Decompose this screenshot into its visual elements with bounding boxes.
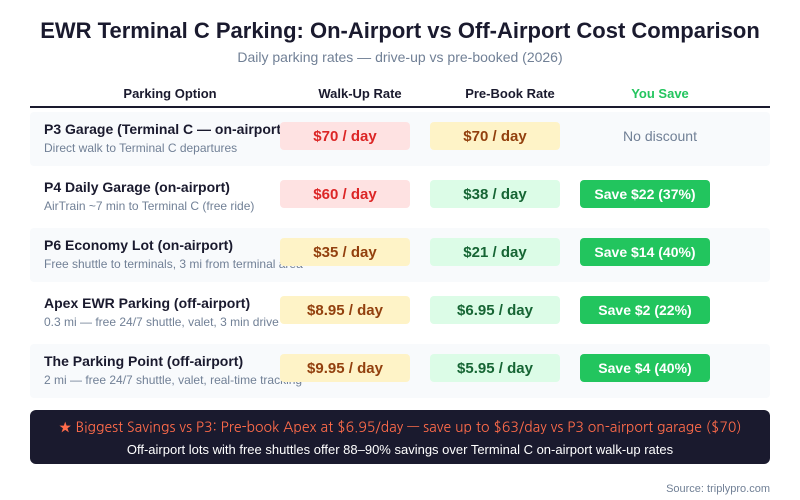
table header: You Save xyxy=(631,86,689,101)
row: The Parking Point xyxy=(30,344,770,398)
row: P3 Garage: P3 Garage (Terminal C — on-airport) xyxy=(44,121,286,137)
row: P3 Garage: $70 / day xyxy=(463,128,527,145)
row: P3 Garage: Direct walk to Terminal C departures xyxy=(44,141,237,155)
row: The Parking Point: Save $4 (40%) xyxy=(598,360,692,376)
row: P3 Garage: $70 / day xyxy=(313,128,377,145)
row: Apex EWR Parking: Apex EWR Parking (off-airport) xyxy=(44,295,250,311)
row: P6 Economy Lot: Save $14 (40%) xyxy=(594,244,696,260)
subtitle: Daily parking rates — drive-up vs pre-booked (2026) xyxy=(237,49,563,65)
row: P4 Daily Garage: $38 / day xyxy=(463,186,527,203)
row: P3 Garage: No discount xyxy=(623,128,697,144)
table header: Walk-Up Rate xyxy=(318,86,402,101)
row: The Parking Point: $9.95 / day xyxy=(307,360,384,377)
table header: Pre-Book Rate xyxy=(465,86,555,101)
row: P3 Garage xyxy=(30,112,770,166)
row: The Parking Point: The Parking Point (off-airport) xyxy=(44,353,243,369)
callout banner: ★ Biggest Savings vs P3: Pre-book Apex at $6.95/day — save up to $63/day vs P3 on-airport garage ($70) xyxy=(59,420,741,435)
row: Apex EWR Parking: $8.95 / day xyxy=(307,302,384,319)
callout banner xyxy=(30,410,770,464)
row: The Parking Point: $5.95 / day xyxy=(457,360,534,377)
row: P6 Economy Lot: $21 / day xyxy=(463,244,527,261)
row: Apex EWR Parking: Save $2 (22%) xyxy=(598,302,692,318)
row: Apex EWR Parking: $6.95 / day xyxy=(457,302,534,319)
row: P4 Daily Garage: $60 / day xyxy=(313,186,377,203)
row: P4 Daily Garage: P4 Daily Garage (on-airport) xyxy=(44,179,230,195)
row: P4 Daily Garage xyxy=(44,179,710,213)
row: P6 Economy Lot: $35 / day xyxy=(313,244,377,261)
row: P4 Daily Garage: Save $22 (37%) xyxy=(594,186,696,202)
table header xyxy=(30,86,770,108)
callout banner: Off-airport lots with free shuttles offer 88–90% savings over Terminal C on-airport walk-up rates xyxy=(127,442,674,457)
row: P4 Daily Garage: AirTrain ~7 min to Terminal C (free ride) xyxy=(44,199,254,213)
row: P6 Economy Lot: P6 Economy Lot (on-airport) xyxy=(44,237,233,253)
source note: Source: triplypro.com xyxy=(666,483,770,495)
row: The Parking Point: 2 mi — free 24/7 shuttle, valet, real-time tracking xyxy=(44,373,302,387)
table header: Parking Option xyxy=(123,86,217,101)
row: P6 Economy Lot xyxy=(30,228,770,282)
title: EWR Terminal C Parking: On-Airport vs Off-Airport Cost Comparison xyxy=(40,18,760,43)
row: P6 Economy Lot: Free shuttle to terminals, 3 mi from terminal area xyxy=(44,257,303,271)
row: Apex EWR Parking: 0.3 mi — free 24/7 shuttle, valet, 3 min drive xyxy=(44,315,279,329)
row: Apex EWR Parking xyxy=(44,295,710,329)
